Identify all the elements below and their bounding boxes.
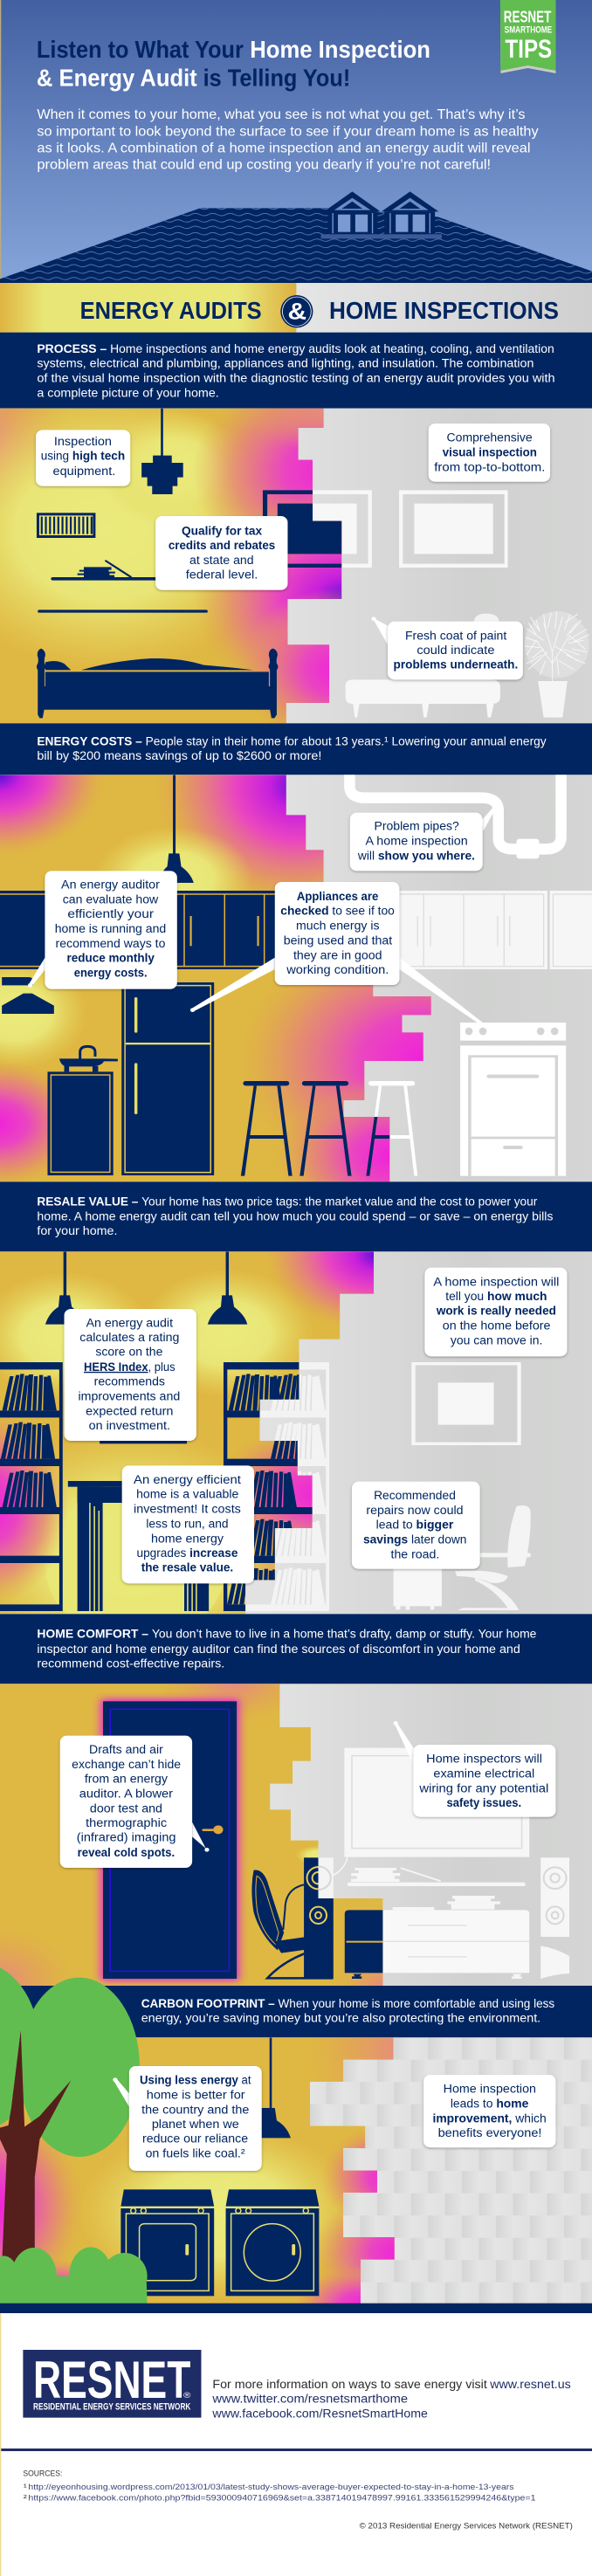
bookcase right [224, 1362, 313, 1611]
fireplace [68, 1438, 219, 1611]
callout: bigger savings: the road. [391, 1547, 439, 1561]
callout: tax credits: credits and rebates [169, 539, 275, 552]
panel: home comfort text: recommend cost-effective repairs. [37, 1657, 224, 1670]
callout: high tech: equipment. [53, 465, 115, 478]
callout: electrical wiring: safety issues. [447, 1796, 521, 1809]
panel: energy costs text [0, 723, 592, 775]
callout: energy auditor: recommend ways to [56, 937, 165, 950]
callout: electrical wiring: Home inspectors will [426, 1753, 542, 1766]
title: & Energy Audit [37, 64, 197, 91]
inspection side: grey bedroom [0, 409, 592, 723]
callout: bigger savings: lead to bigger [376, 1519, 454, 1532]
callout: appliances: being used and that [284, 934, 393, 947]
speakers [306, 1857, 569, 1979]
badge: RESNET SmartHome Tips [500, 0, 555, 73]
contact links: For more information on ways to save energy visit [212, 2378, 487, 2391]
television [333, 1748, 529, 1876]
washer [226, 2189, 319, 2296]
callout: fresh coat of paint [371, 616, 523, 679]
pendant lamps [45, 1251, 247, 1325]
callout: resale value [122, 1465, 254, 1583]
callout: less energy: reduce our reliance [142, 2132, 248, 2146]
callout: HERS index: recommends [94, 1375, 165, 1388]
title: is Telling You! [203, 64, 350, 91]
header: sky background [0, 0, 592, 283]
callout: energy auditor: home is running and [55, 922, 166, 935]
callout: energy auditor: can evaluate how [63, 892, 158, 906]
media cabinet [382, 1910, 529, 1979]
pendant lamp [262, 2037, 291, 2138]
callout: fresh coat of paint: Fresh coat of paint [405, 629, 507, 643]
callout: appliances [190, 882, 495, 1034]
panel: resale value text [0, 1181, 592, 1251]
callout: visual inspection: Comprehensive [447, 431, 533, 444]
audit side: thermal media room [0, 1684, 382, 1986]
callout: bigger savings [352, 1482, 480, 1569]
callout: energy auditor: reduce monthly [67, 952, 155, 965]
oven [460, 1023, 566, 1176]
callout: fresh coat of paint: could indicate [416, 644, 494, 657]
intro paragraph [37, 107, 539, 172]
heading: energy audits: ENERGY AUDITS [80, 297, 262, 324]
callout: tax credits: at state and [189, 554, 254, 567]
panel: living room scene [0, 1251, 592, 1614]
contact links [212, 2378, 571, 2421]
callout: HERS index: expected return [86, 1404, 173, 1418]
panel: process text [0, 333, 592, 409]
panel: process text: a complete picture of your home. [37, 387, 219, 400]
picture frame [411, 1362, 521, 1445]
chair [455, 1505, 531, 1610]
callout: home improvement: leads to home [451, 2097, 528, 2111]
panel: home comfort text [0, 1614, 592, 1684]
callout: appliances: much energy is [296, 919, 380, 933]
badge: RESNET SmartHome Tips: SMARTHOME [505, 24, 552, 35]
sources [23, 2469, 536, 2503]
contact links: www.facebook.com/ResnetSmartHome [212, 2407, 428, 2421]
callout: electrical wiring: examine electrical [433, 1767, 534, 1780]
callout: bigger savings: savings later down [363, 1533, 466, 1546]
callout: drafts: reveal cold spots. [78, 1846, 175, 1859]
callout: how much work [424, 1268, 567, 1356]
inspection side: grey study [0, 1251, 592, 1614]
roof with dormer windows [0, 191, 592, 283]
callout: how much work: you can move in. [451, 1333, 542, 1347]
icon: ampersand badge [280, 295, 313, 327]
office chair [251, 1870, 333, 1978]
callout: less energy: Using less energy at [140, 2074, 251, 2087]
audit side: thermal laundry room [0, 2038, 395, 2304]
badge: RESNET SmartHome Tips: RESNET [504, 7, 551, 26]
callout: drafts [60, 1736, 210, 1868]
panel: kitchen scene [0, 775, 592, 1182]
plant [525, 611, 589, 681]
callout: drafts: auditor. A blower [79, 1787, 174, 1801]
callout: resale value: upgrades increase [137, 1546, 237, 1560]
callout: how much work: tell you how much [445, 1290, 547, 1303]
callout: tax credits [155, 516, 287, 590]
panel: bedroom scene [0, 409, 592, 775]
callout: visual inspection: visual inspection [443, 446, 537, 459]
callout: home improvement: benefits everyone! [438, 2126, 541, 2139]
callout: problem pipes: Problem pipes? [375, 820, 459, 833]
pipes [349, 775, 561, 858]
callout: energy auditor: efficiently your [67, 907, 155, 920]
callout: resale value: home energy [151, 1532, 224, 1546]
callout: drafts: door test and [90, 1801, 162, 1815]
panel: entertainment room scene [0, 1684, 592, 1986]
bookcase, grey half [224, 1362, 329, 1611]
callout: high tech [36, 430, 130, 486]
badge: RESNET SmartHome Tips: TIPS [506, 35, 552, 64]
pendant lamp [163, 775, 194, 883]
audit side: thermal bedroom [0, 409, 342, 723]
sources: ² [24, 2494, 27, 2503]
callout: problem pipes [350, 806, 497, 871]
callout: HERS index: score on the [95, 1346, 162, 1359]
callout: tax credits: federal level. [186, 568, 258, 582]
title: Home Inspection [250, 36, 430, 63]
callout: resale value: less to run, and [146, 1517, 229, 1531]
callout: less energy: the country and the [141, 2103, 249, 2117]
callout: home improvement [423, 2075, 555, 2147]
callout: HERS index: improvements and [79, 1389, 180, 1403]
callout: appliances: working condition. [286, 963, 389, 976]
callout: high tech: using high tech [41, 450, 125, 463]
audit side: thermal kitchen [0, 775, 431, 1182]
callout: less energy: planet when we [152, 2118, 239, 2131]
callout: tax credits: Qualify for tax [182, 524, 262, 538]
callout: visual inspection: from top-to-bottom. [434, 460, 545, 474]
bushes [0, 2247, 148, 2305]
sources: https://www.facebook.com/photo.php?fbid=593000940716969&set=a.338714019478997.99161.333561529994246&type=1 [28, 2494, 536, 2503]
panel: carbon footprint text [0, 1986, 592, 2037]
pendant lamp [141, 409, 183, 494]
callout: resale value: investment! It costs [134, 1503, 241, 1516]
callout: HERS index: on investment. [89, 1419, 170, 1432]
logo: RESNET [23, 2350, 201, 2418]
upper cabinets [340, 891, 592, 969]
callout: drafts: Drafts and air [89, 1743, 163, 1756]
callout: problem pipes: A home inspection [366, 835, 468, 848]
callout: drafts: exchange can’t hide [72, 1758, 181, 1771]
refrigerator [121, 982, 214, 1175]
callout: appliances: Appliances are [297, 890, 378, 903]
callout: electrical wiring: wiring for any potential [418, 1781, 548, 1795]
callout: bigger savings: repairs now could [366, 1504, 464, 1517]
callout: appliances: checked to see if too [280, 905, 395, 918]
logo: RESNET: ® [183, 2391, 190, 2400]
callout: home improvement: Home inspection [444, 2083, 536, 2096]
sources: ¹ [24, 2483, 27, 2492]
callout: HERS index: An energy audit [86, 1316, 173, 1330]
callout: energy auditor [28, 871, 177, 989]
callout: HERS index [65, 1309, 196, 1441]
callout: visual inspection [429, 424, 550, 482]
bed [37, 649, 278, 718]
inspection side: grey kitchen [0, 775, 592, 1181]
callout: resale value: home is a valuable [136, 1488, 238, 1501]
panel: resale value text: for your home. [37, 1224, 117, 1237]
callout: home improvement: improvement, which [433, 2111, 547, 2125]
logo: RESNET: RESIDENTIAL ENERGY SERVICES NETWORK [33, 2401, 190, 2412]
callout: drafts: (infrared) imaging [77, 1831, 176, 1844]
shelf with books [348, 1867, 526, 1910]
callout: energy auditor: An energy auditor [61, 878, 160, 892]
contact links: www.resnet.us [489, 2378, 571, 2391]
column headings band [0, 283, 592, 333]
sources: http://eyeonhousing.wordpress.com/2013/01/03/latest-study-shows-average-buyer-expected-to-stay-in-a-home-13-years [28, 2483, 514, 2492]
callout: HERS index: HERS Index, plus [84, 1360, 176, 1374]
wall shelf with books [51, 560, 159, 581]
audit side: thermal study [0, 1252, 374, 1614]
footer [0, 2304, 592, 2576]
media cabinet, thermal half [345, 1910, 385, 1979]
callout: energy auditor: energy costs. [74, 967, 148, 980]
speaker [304, 1857, 334, 1979]
callout: drafts: from an energy [85, 1773, 169, 1786]
door with thermal glow [100, 1699, 239, 1980]
callout: electrical wiring [394, 1721, 555, 1817]
callout: how much work: work is really needed [436, 1305, 556, 1318]
desk unit [394, 1569, 442, 1609]
title [37, 36, 430, 91]
sources: SOURCES: [23, 2469, 62, 2478]
contact links: www.twitter.com/resnetsmarthome [212, 2393, 408, 2406]
callout: bigger savings: Recommended [374, 1489, 456, 1502]
floor vent [37, 513, 95, 538]
dryer [120, 2189, 214, 2296]
callout: resale value: the resale value. [141, 1561, 233, 1574]
callout: HERS index: calculates a rating [79, 1331, 179, 1344]
callout: how much work: on the home before [443, 1319, 550, 1333]
callout: resale value: An energy efficient [134, 1473, 241, 1486]
callout: fresh coat of paint: problems underneath. [394, 658, 518, 672]
callout: high tech: Inspection [54, 435, 112, 448]
title: Listen to What Your [37, 36, 244, 63]
callout: problem pipes: will show you where. [357, 849, 475, 863]
callout: how much work: A home inspection will [433, 1275, 559, 1289]
logo: RESNET: RESNET [33, 2350, 190, 2409]
callout: less energy [113, 2066, 262, 2171]
long shelf [38, 610, 208, 613]
intro paragraph: problem areas that could end up costing you dearly if you’re not careful! [37, 157, 491, 172]
callout: drafts: thermographic [86, 1816, 167, 1829]
bookcase left [0, 1362, 63, 1611]
bar stools [241, 1081, 389, 1176]
panel: energy costs text: bill by $200 means savings of up to $2600 or more! [37, 749, 321, 762]
upper cabinets [0, 891, 275, 969]
inspection side: brick wall [0, 2037, 592, 2304]
callout: less energy: on fuels like coal.² [145, 2147, 245, 2160]
callout: less energy: home is better for [147, 2088, 245, 2102]
panel: carbon footprint and laundry scene [0, 1967, 592, 2304]
icon: ampersand badge: & [287, 298, 306, 325]
tree [0, 1962, 140, 2264]
range hood [2, 977, 54, 1014]
callout: appliances: they are in good [293, 948, 382, 962]
stove and pan [47, 1046, 118, 1175]
stool, grey half [366, 1081, 417, 1176]
picture frame, thermal half [262, 490, 342, 568]
inspection side: grey media room [0, 1684, 592, 1986]
